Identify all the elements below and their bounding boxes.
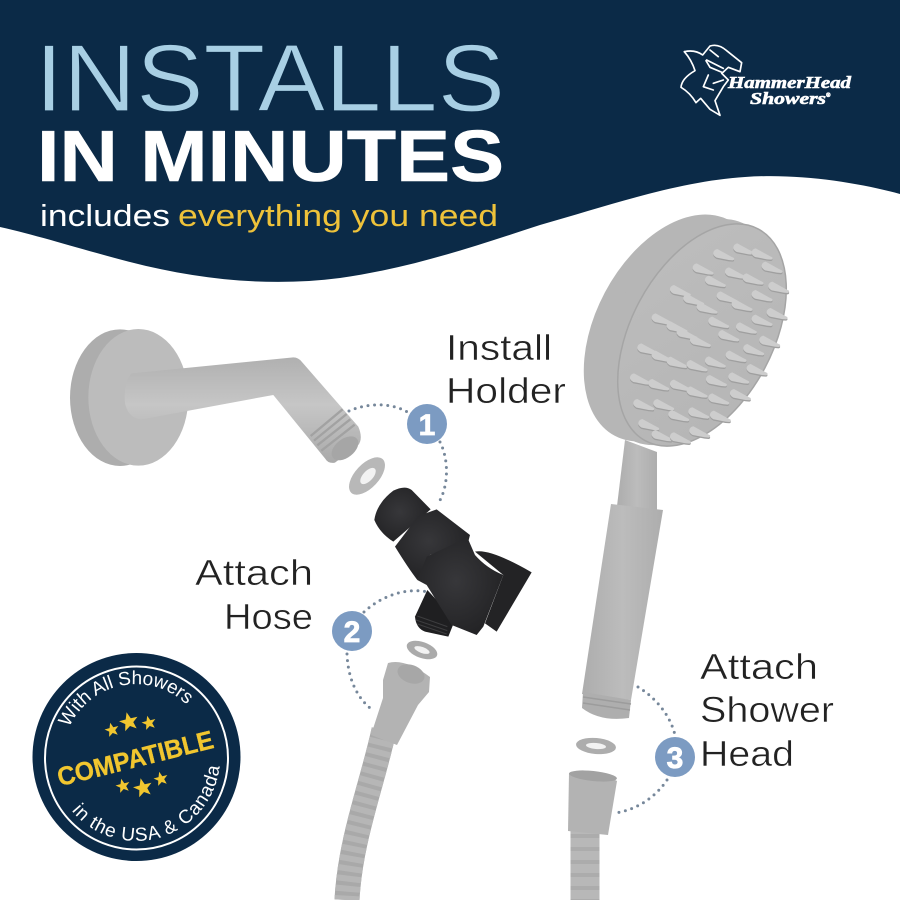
step badge 3: 3 xyxy=(667,742,683,775)
handle threads xyxy=(582,692,631,719)
logo wordmark: HammerHead xyxy=(727,73,852,92)
logo wordmark: Showers xyxy=(750,89,826,108)
arm pipe xyxy=(125,357,361,463)
step badge 2: 2 xyxy=(344,616,360,649)
lower hose, step 3 xyxy=(568,769,617,900)
seal top text: With All Showers xyxy=(58,670,192,724)
hose ribs xyxy=(347,730,384,900)
hose connector xyxy=(568,772,617,835)
step badge 1: 1 xyxy=(419,409,435,442)
label: Attach Shower Head: Shower xyxy=(700,689,834,730)
nut opening xyxy=(395,661,427,687)
handle neck xyxy=(617,440,657,512)
dotted path step 1 xyxy=(349,405,446,505)
subtitle: includes xyxy=(40,198,170,233)
label: Attach Hose: Hose xyxy=(224,596,313,637)
arm opening xyxy=(327,432,363,465)
logo: HammerHead Showers xyxy=(681,45,852,115)
clip back xyxy=(475,551,532,632)
arm threads xyxy=(311,409,355,451)
black holder assembly xyxy=(374,488,532,637)
label: Attach Shower Head: Attach xyxy=(700,646,818,687)
thread lines xyxy=(416,616,447,634)
hose and nut, step 2 xyxy=(347,661,430,900)
logo wordmark: ® xyxy=(826,92,831,99)
label: Attach Hose: Attach xyxy=(195,552,313,593)
washer 3 xyxy=(575,736,617,756)
dotted path step 2 xyxy=(347,591,428,711)
label: Attach Shower Head xyxy=(700,646,834,774)
step badge 3 xyxy=(655,737,695,777)
head back rim xyxy=(548,185,811,474)
seal bottom text: in the USA & Canada xyxy=(72,766,220,841)
nozzles xyxy=(630,243,789,445)
label: Install Holder: Holder xyxy=(446,370,566,411)
label: Install Holder xyxy=(446,327,566,411)
hand shower head xyxy=(548,185,821,719)
seal disc xyxy=(32,653,240,861)
holder body xyxy=(417,537,503,635)
swivel collar xyxy=(374,488,431,542)
logo wordmark xyxy=(727,73,852,108)
label: Install Holder: Install xyxy=(446,327,552,368)
shower arm with flange xyxy=(70,329,363,466)
head face xyxy=(583,196,821,474)
hose nut xyxy=(371,662,430,745)
seal ring xyxy=(45,666,228,850)
swivel ring xyxy=(395,509,470,580)
hose ribs xyxy=(570,825,600,900)
label: Attach Hose xyxy=(195,552,313,637)
title: IN MINUTES: IN MINUTES xyxy=(37,117,504,197)
compatible seal badge xyxy=(32,653,240,861)
hose xyxy=(347,730,384,900)
icon: shark xyxy=(681,45,742,115)
label: Attach Shower Head: Head xyxy=(700,733,794,774)
step 2 washer xyxy=(404,637,440,663)
step badge 1 xyxy=(407,404,447,444)
flange xyxy=(70,329,188,466)
header wave banner xyxy=(0,0,900,282)
thread lines xyxy=(583,697,631,710)
subtitle: everything you need xyxy=(178,198,498,233)
dotted path step 3 xyxy=(615,687,675,813)
step badge 2 xyxy=(332,611,372,651)
subtitle xyxy=(40,198,498,233)
washer 1 xyxy=(343,451,391,501)
connector opening xyxy=(569,769,617,783)
threaded nipple xyxy=(415,590,455,637)
seal main text: COMPATIBLE xyxy=(54,724,217,792)
handle tube xyxy=(582,504,663,700)
title: INSTALLS: INSTALLS xyxy=(35,25,505,132)
seal stars xyxy=(103,710,169,798)
rib highlights xyxy=(570,825,600,900)
